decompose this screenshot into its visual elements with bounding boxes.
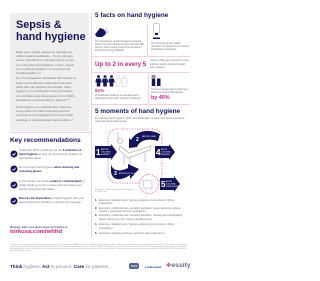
- intro paragraph 2: of microbial cross-transmission from HCPs: [16, 94, 74, 98]
- arrow 4: 4: [156, 148, 161, 157]
- weblink callout: Message: learn more about sepsis and hygiene at: [10, 226, 67, 229]
- moment 1: Examples: shaking hands, helping a patient to move around, clinical examination: [99, 198, 174, 205]
- stat text: cases of HAIs are caused by cross-infection via the hands of health care workers⁹: [150, 59, 189, 69]
- intro paragraph 2: [16, 76, 76, 102]
- intro paragraph 1: [16, 50, 74, 75]
- moment 5: Examples: changing bed linen, perfusion speed adjustment: [99, 232, 164, 235]
- moment 4: 4.: [95, 223, 97, 226]
- intro paragraph 1: million deaths worldwide – it's the primary: [16, 54, 73, 58]
- weblink callout: [10, 226, 68, 235]
- recommendation 4: Discuss the importance of hand hygiene with your patients and their families to spread the message: [19, 196, 84, 204]
- heading: 5 moments: 5 moments of hand hygiene: [95, 108, 180, 115]
- arrow 1: BEFORE: [101, 149, 109, 151]
- moments list: [95, 198, 182, 235]
- fact: people icons, 61%: [95, 75, 141, 100]
- moment 3: Examples: oral/dental care, secretion aspiration, dressing and manipulating blood, clearing up urine, faeces, handling waste: [99, 214, 182, 220]
- icon: patient bed: [118, 132, 151, 165]
- arrow 1: [95, 144, 117, 160]
- recommendation list: [10, 148, 85, 204]
- arrow 4: [155, 144, 175, 160]
- intro paragraph 2: (healthcare professionals) to patients.⁴⁵: [16, 98, 70, 102]
- title: hand hygiene: [16, 31, 86, 43]
- icon: bars: [152, 75, 160, 86]
- references small print: 1. World Sepsis Day. World Health Organization 2017. Improving the prevention, diagnosis and clinical management of sepsis. 2. Rudd KE et al. Global, regional and national sepsis incidence and mortality 1990-2017. Lancet 2020. 3. Rhee C et al. Prevalence, underlying causes, and preventability of sepsis-associated mortality in US acute care hospitals. JAMA Netw Open 2019. 4. Allegranzi B et al. Burden of endemic health-care-associated infection in developing countries. Lancet 2011. 5. WHO Guidelines on hand hygiene in health care. Geneva: World Health Organization 2009. 6. Boyce JM, Pittet D. Guideline for hand hygiene in health-care settings. MMWR 2002. Erasmus V et al. Systematic review of studies on compliance with hand hygiene guidelines in hospital care. Infect Control Hosp Epidemiol 2010. Pittet D et al. Effectiveness of a hospital-wide programme to improve compliance with hand hygiene. Lancet 2000. Luangasanatip N et al. Comparative efficacy of interventions to promote hand hygiene in hospital. BMJ 2015. Essity and Tork are trademarks. All rights reserved.: [10, 243, 188, 252]
- fact: people icons, 61%: of healthcare workers on average aren't adhering to best hand hygiene practices¹⁰: [95, 94, 141, 100]
- logo: essity: ❖essity: [166, 262, 191, 269]
- logo: Leukoplast: Leukoplast: [145, 264, 161, 268]
- intro paragraph 2: (HAI) that can develop into sepsis, hand: [16, 85, 71, 89]
- logo: Tork: Tork: [131, 264, 137, 268]
- arrow 4: TOUCHING: [161, 152, 171, 154]
- moment 5: 5.: [95, 232, 97, 235]
- arrow 2 curved: 2: [136, 137, 139, 143]
- diagram caption: Adapted from WHO Guidelines on Hand Hygiene in Health Care: [95, 188, 134, 193]
- arrow 4: AFTER: [161, 148, 168, 151]
- recommendation 2: Do not forget hand hygiene when donning and removing gloves: [19, 165, 79, 173]
- intro paragraph 1: is a contributing factor in one third of all: [16, 67, 70, 71]
- title: [16, 19, 86, 43]
- intro paragraph 3: removal of microorganisms such as hand-: [16, 113, 73, 117]
- moment 2: 2.: [95, 206, 97, 210]
- arrow 4: A PATIENT: [161, 153, 171, 156]
- arrow 3 curved: AFTER BODY FLUID: [119, 172, 137, 175]
- moment 1: 1.: [95, 198, 97, 202]
- title: Sepsis &: [16, 19, 62, 31]
- arrow 3 curved: [111, 164, 139, 179]
- intro paragraph 2: As 1 in 10 patients worldwide will acquire at: [16, 76, 76, 80]
- fact: bars icon, 40%: by 40%: [151, 94, 170, 100]
- patient zone dashed outline: [108, 129, 162, 183]
- intro paragraph 3: to any action of hand cleansing and the: [16, 109, 70, 113]
- icon: hands: [95, 28, 109, 37]
- intro paragraph 2: hygiene is a crucial part of the prevention: [16, 89, 72, 93]
- arrow 5: SURROUNDINGS: [166, 186, 182, 188]
- fact: bars icon, 40%: Improved hand hygiene has been shown to reduce HAI spread: [151, 88, 188, 94]
- moment 2: Examples: oral/dental care, secretion aspiration, wound dressing, catheter insertion, preparation of food, medications: [99, 206, 181, 213]
- moment 4: Examples: shaking hands, helping a patient to move around, clinical examination: [99, 223, 174, 230]
- fact: bars icon, 40%: [151, 75, 188, 100]
- stat: up to 2 in every 5: Up to 2 in every 5: [95, 60, 146, 68]
- heading: key recommendations: Key recommendations: [10, 137, 81, 144]
- fact 2: dispenser icon and text: [151, 23, 189, 51]
- panel: intro: [10, 13, 89, 131]
- icon: dispenser: [153, 23, 160, 39]
- intro paragraph 3: [16, 105, 74, 122]
- fact 1: hands icon and text: [95, 28, 144, 52]
- diagram: 5 moments: [95, 128, 182, 194]
- arrow 2 curved: BEFORE CLEAN: [142, 135, 157, 138]
- intro paragraph 1: cause of death from infection and it's more: [16, 58, 74, 62]
- moments intro text: For effective hand hygiene, HCPs should disinfect or wash their hands at several moments during patient care:: [95, 117, 184, 123]
- recommendation 1: Follow the WHO guidelines on the 5 moments of hand hygiene so that you can perform hygiene at appropriate times: [19, 148, 82, 160]
- arrow 3 curved: 3: [114, 171, 117, 177]
- fact 1: hands icon and text: The importance of hand hygiene amongst HCPs has been apparent since the late 19th century with a study around the spread of infections during childbirth⁷: [95, 40, 144, 52]
- fact: people icons, 61%: 61%: [95, 88, 104, 92]
- intro paragraph 3: washing or alcohol-based hand sanitizer.⁶: [16, 118, 73, 122]
- arrow 2 curved: [129, 131, 160, 148]
- intro paragraph 3: Hand hygiene is a general term referring: [16, 105, 71, 109]
- intro paragraph 2: least one healthcare associated infection: [16, 81, 72, 85]
- arrow 1: 1: [96, 148, 101, 157]
- intro paragraph 1: common than heart attacks. In fact, sepsis: [16, 63, 74, 67]
- link: torkusa.com/whhd: [10, 229, 62, 235]
- recommendation 3: If your hands are visibly soiled or contaminated by bodily fluids, go to the nearest sink and wash your hands using soap and water: [19, 179, 85, 191]
- intro paragraph 1: Each year, sepsis causes on average six: [16, 50, 72, 54]
- arrow 1: A PATIENT: [101, 153, 111, 156]
- heading: 5 facts: 5 facts on hand hygiene: [95, 12, 168, 19]
- arrow 1: TOUCHING: [101, 152, 111, 154]
- moment 3: 3.: [95, 214, 97, 217]
- surroundings dashed circle: [140, 174, 158, 194]
- arrow 5: 5: [161, 180, 166, 189]
- intro paragraph 1: hospital deaths.¹²³: [16, 71, 41, 75]
- arrow 5: [160, 176, 182, 192]
- arrow 5: TOUCHING: [166, 184, 176, 186]
- icon: people: [95, 75, 128, 87]
- fact 2: dispenser icon and text: The convenient and visible placement of dispensers is crucial to facilitate compliance⁸: [151, 42, 189, 51]
- arrow 5: AFTER: [166, 180, 173, 183]
- tagline: Think hygiene. Act to prevent. Care for patients.: [10, 264, 109, 269]
- logo: Tork: [129, 263, 139, 269]
